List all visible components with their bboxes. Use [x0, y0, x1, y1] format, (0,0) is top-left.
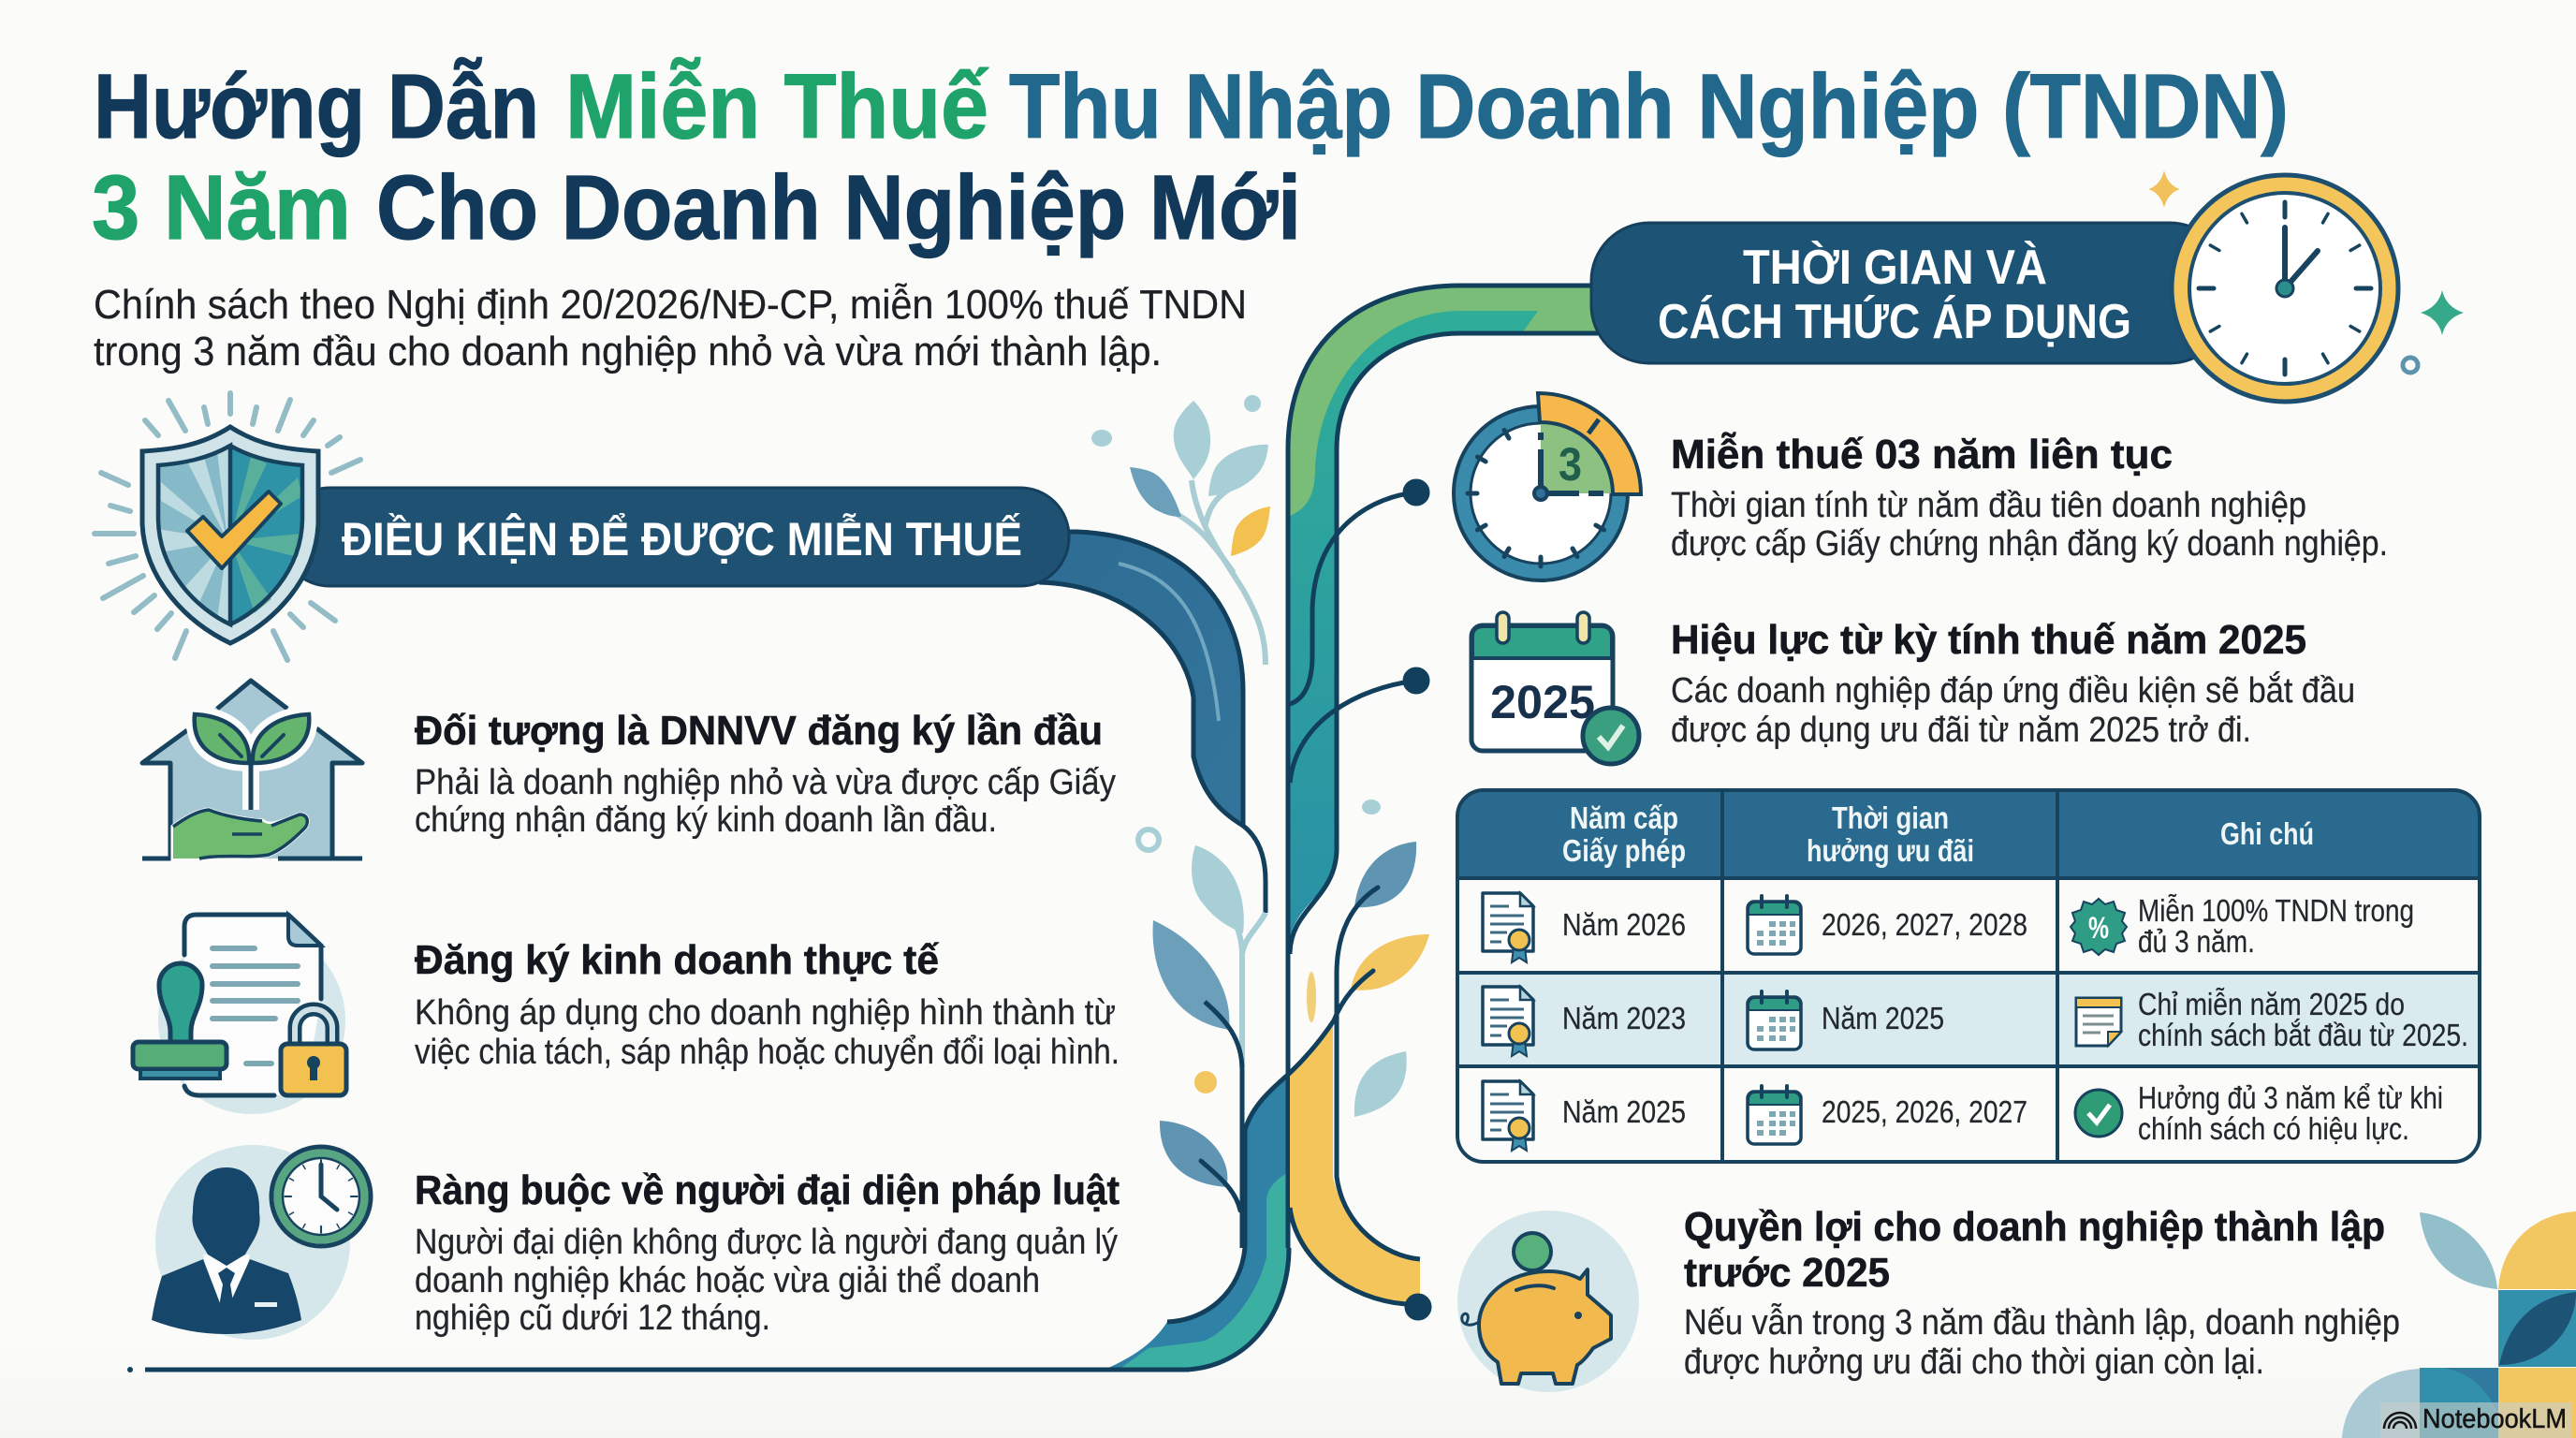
table row: 2025: 2025, 2026, 2027 [1822, 1094, 2027, 1129]
text: legal representative: nghiệp cũ dưới 12 tháng. [415, 1299, 770, 1338]
NotebookLM badge [2380, 1402, 2572, 1438]
table row: 2026: 2026, 2027, 2028 [1822, 907, 2027, 942]
connector path: timing header (teal and green) [1288, 286, 1605, 1248]
text: first-time SME: Phải là doanh nghiệp nhỏ và vừa được cấp Giấy [415, 763, 1116, 802]
title: Hướng Dẫn [94, 55, 539, 157]
decorative vine: upper leaves [1091, 395, 1270, 665]
table header: Ghi chú [2220, 816, 2314, 851]
title: Miễn Thuế [565, 55, 989, 157]
table row: 2026: đủ 3 năm. [2138, 924, 2255, 959]
table row: 2026 [1483, 893, 2414, 962]
text: effective from 2025: được áp dụng ưu đãi từ năm 2025 trở đi. [1671, 711, 2251, 750]
table header: Giấy phép [1562, 833, 1686, 868]
table row: 2026: Miễn 100% TNDN trong [2138, 893, 2414, 928]
title: 3 Năm [92, 156, 351, 258]
table row: 2025 [1483, 1080, 2443, 1151]
item: 3-year exemption [1454, 393, 2388, 580]
text: benefits: Quyền lợi cho doanh nghiệp thành lập [1684, 1204, 2385, 1250]
text: legal representative [415, 1167, 1120, 1338]
title: Thu Nhập Doanh Nghiệp (TNDN) [1009, 55, 2289, 157]
decorative vine: middle leaves [1138, 829, 1266, 1248]
table row: 2025: Năm 2025 [1562, 1094, 1686, 1129]
text: effective from 2025 [1671, 617, 2355, 750]
table row: 2023 [1483, 987, 2468, 1056]
text: legal representative: Ràng buộc về người đại diện pháp luật [415, 1167, 1120, 1213]
text: first-time SME: chứng nhận đăng ký kinh doanh lần đầu. [415, 800, 997, 840]
icon: calendar 2025 [1471, 612, 1639, 764]
subtitle: trong 3 năm đầu cho doanh nghiệp nhỏ và vừa mới thành lập. [94, 329, 1162, 374]
text: effective from 2025: Các doanh nghiệp đáp ứng điều kiện sẽ bắt đầu [1671, 670, 2355, 711]
heading banner: timing [1591, 223, 2228, 363]
heading banner: conditions: ĐIỀU KIỆN ĐỂ ĐƯỢC MIỄN THUẾ [342, 513, 1022, 565]
table row: 2026: % [2088, 911, 2109, 945]
text: real registration: Không áp dụng cho doanh nghiệp hình thành từ [415, 993, 1116, 1033]
table row: 2026: Năm 2026 [1562, 907, 1686, 942]
text: 3-year exemption: được cấp Giấy chứng nhận đăng ký doanh nghiệp. [1671, 524, 2388, 564]
table row: 2023: Năm 2025 [1822, 1001, 1944, 1035]
text: first-time SME [415, 708, 1116, 840]
table header: hưởng ưu đãi [1807, 833, 1974, 868]
text: real registration: Đăng ký kinh doanh thực tế [415, 937, 940, 983]
connector path: benefit branch (yellow) [1290, 1020, 1420, 1304]
icon: piggy bank [1457, 1211, 1639, 1392]
icon: person with clock [152, 1145, 371, 1340]
title: Cho Doanh Nghiệp Mới [376, 156, 1301, 258]
connector swoosh: bottom of conditions panel [127, 1075, 1289, 1372]
icon: house with sprout [142, 681, 362, 858]
text: legal representative: Người đại diện không được là người đang quản lý [415, 1223, 1118, 1262]
decorative vine: right leaves [1245, 800, 1429, 1130]
heading banner: timing: THỜI GIAN VÀ [1743, 241, 2047, 295]
text: 3-year exemption [1671, 431, 2388, 564]
text: real registration [415, 937, 1120, 1072]
text: legal representative: doanh nghiệp khác hoặc vừa giải thể doanh [415, 1261, 1040, 1300]
heading banner: conditions [281, 488, 1069, 586]
icon: shield with check [95, 393, 360, 660]
title [92, 55, 2289, 258]
item: legal representative [152, 1145, 1120, 1340]
icon: clock with 3-year wedge [1454, 393, 1641, 580]
table grid [1457, 790, 2480, 1162]
text: effective from 2025: Hiệu lực từ kỳ tính thuế năm 2025 [1671, 617, 2306, 663]
table row: 2025: Hưởng đủ 3 năm kể từ khi [2138, 1080, 2443, 1115]
icon: clock with 3-year wedge: 3 [1559, 438, 1582, 491]
table row: 2023: Năm 2023 [1562, 1001, 1686, 1035]
text: benefits: Nếu vẫn trong 3 năm đầu thành lập, doanh nghiệp [1684, 1302, 2400, 1343]
table row: 2025: chính sách có hiệu lực. [2138, 1111, 2409, 1146]
item: real registration [133, 915, 1120, 1114]
decorative corner tiles [2342, 1211, 2576, 1438]
table header [1457, 790, 2480, 878]
panel: conditions [95, 393, 1120, 1340]
table header: Thời gian [1832, 800, 1949, 835]
icon: sparkles [2148, 170, 2464, 373]
connector dots and lines [1290, 481, 1429, 1318]
item: benefits for earlier businesses [1457, 1204, 2400, 1392]
icon: document, stamp and lock [133, 915, 346, 1114]
icon: large clock [2172, 175, 2398, 402]
table header: Năm cấp [1570, 800, 1678, 835]
text: benefits [1684, 1204, 2400, 1382]
icon: calendar 2025: 2025 [1490, 676, 1595, 728]
table row: 2023: Chỉ miễn năm 2025 do [2138, 987, 2405, 1021]
item: first-time SME [142, 681, 1116, 858]
text: benefits: được hưởng ưu đãi cho thời gian còn lại. [1684, 1343, 2264, 1382]
text: 3-year exemption: Thời gian tính từ năm đầu tiên doanh nghiệp [1671, 486, 2306, 525]
NotebookLM badge: NotebookLM [2422, 1404, 2567, 1434]
table row: 2023: chính sách bắt đầu từ 2025. [2138, 1018, 2468, 1052]
heading banner: timing: CÁCH THỨC ÁP DỤNG [1658, 295, 2131, 349]
text: real registration: việc chia tách, sáp nhập hoặc chuyển đổi loại hình. [415, 1033, 1120, 1072]
text: 3-year exemption: Miễn thuế 03 năm liên tục [1671, 431, 2173, 477]
subtitle: Chính sách theo Nghị định 20/2026/NĐ-CP, miễn 100% thuế TNDN [94, 282, 1247, 328]
table: license year schedule [1457, 790, 2480, 1162]
text: benefits: trước 2025 [1684, 1250, 1890, 1296]
connector path: conditions header to lower vine [1039, 532, 1266, 913]
item: effective from 2025 [1471, 612, 2355, 764]
panel: timing and application [1454, 170, 2480, 1392]
subtitle [94, 282, 1247, 374]
text: first-time SME: Đối tượng là DNNVV đăng ký lần đầu [415, 708, 1103, 754]
